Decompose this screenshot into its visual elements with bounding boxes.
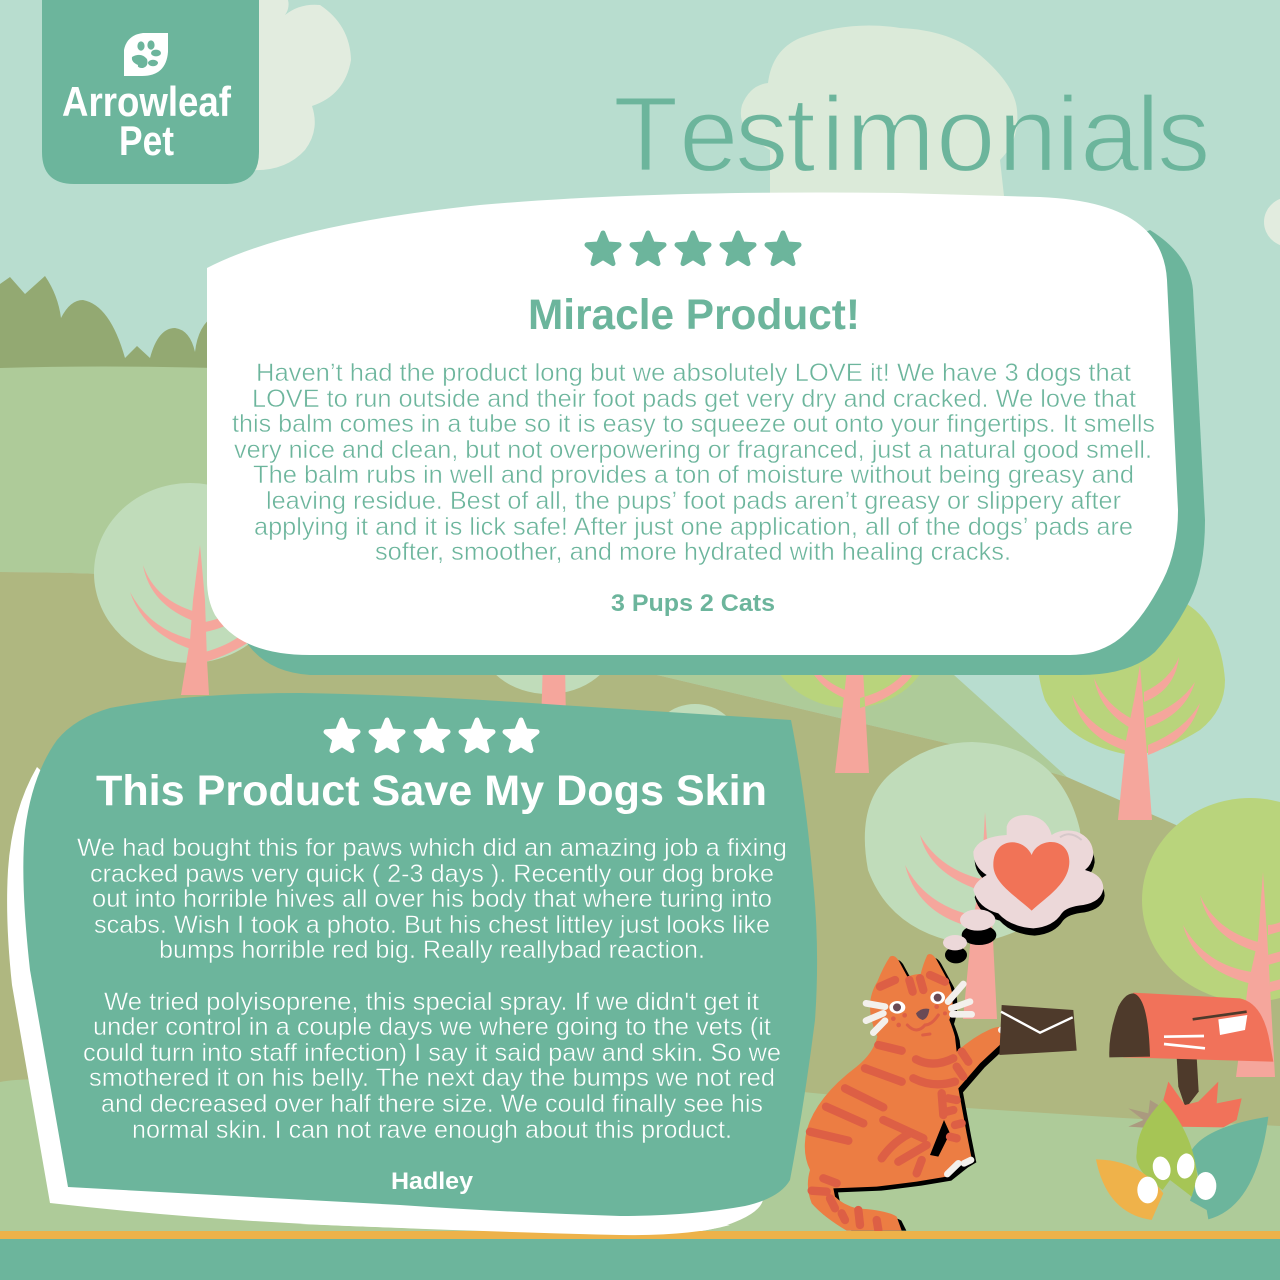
review text: very nice and clean, but not overpowering or fragranced, just a natural good smell. xyxy=(234,436,1152,464)
bottom stripe xyxy=(0,1231,1280,1280)
review text: and decreased over half there size. We could finally see his xyxy=(101,1090,763,1118)
panel: second review xyxy=(23,693,817,1216)
logo badge xyxy=(42,0,259,184)
mailbox xyxy=(1109,993,1273,1108)
panel: first review xyxy=(207,192,1178,655)
review text: Haven’t had the product long but we absolutely LOVE it! We have 3 dogs that xyxy=(256,359,1131,387)
icon: leaf with paw xyxy=(124,33,168,76)
review text: this balm comes in a tube so it is easy to squeeze out onto your fingertips. It smells xyxy=(232,410,1155,438)
review text: normal skin. I can not rave enough about this product. xyxy=(132,1116,732,1144)
thought bubble xyxy=(943,815,1105,963)
review text: We had bought this for paws which did an amazing job a fixing xyxy=(77,834,787,862)
foreground meadow xyxy=(0,1079,1280,1240)
icon: heart xyxy=(993,842,1069,911)
reviewer name: Hadley xyxy=(391,1168,474,1195)
heading: Miracle Product: Miracle Product! xyxy=(528,291,860,339)
tree: right edge xyxy=(1142,798,1280,1077)
tree: far right back xyxy=(1038,590,1225,820)
tree: centre back xyxy=(480,586,616,725)
title xyxy=(616,94,1206,171)
tree: small back xyxy=(653,704,737,776)
logo badge: Pet xyxy=(119,117,174,164)
review text: out into horrible hives all over his body that where turing into xyxy=(92,885,772,913)
review text xyxy=(232,359,1155,566)
tree: left xyxy=(94,483,286,695)
review text: smothered it on his belly. The next day the bumps we not red xyxy=(89,1064,775,1092)
tree: behind cat xyxy=(865,742,1080,1019)
heading: This Product Save My Dogs Skin: This Product Save My Dogs Skin xyxy=(96,767,767,815)
panel: second review shadow overlap on stripe xyxy=(300,1215,730,1235)
grass tuft xyxy=(1128,1082,1242,1128)
review text: under control in a couple days we where going to the vets (it xyxy=(93,1013,771,1041)
logo wordmark: Arrowleaf xyxy=(62,78,232,125)
review text: bumps horrible red big. Really reallybad reaction. xyxy=(159,936,705,964)
review text: leaving residue. Best of all, the pups’ foot pads aren’t greasy or slippery after xyxy=(266,487,1121,515)
review text: applying it and it is lick safe! After just one application, all of the dogs’ pads are xyxy=(254,513,1133,541)
panel: second review shadow xyxy=(7,767,763,1235)
review text xyxy=(77,834,787,1144)
review text: The balm rubs in well and provides a ton of moisture without being greasy and xyxy=(253,461,1134,489)
illustration: cat, thought bubble, mailbox, leaves xyxy=(805,815,1273,1231)
cloud: top left xyxy=(250,0,351,170)
green hill xyxy=(0,366,1067,777)
reviewer name: 3 Pups 2 Cats xyxy=(611,590,775,617)
review text: scabs. Wish I took a photo. But his chest littley just looks like xyxy=(94,911,770,939)
cloud: behind title xyxy=(741,26,1017,205)
envelope xyxy=(999,1005,1077,1055)
cloud: right edge xyxy=(1264,197,1280,247)
review text: LOVE to run outside and their foot pads get very dry and cracked. We love that xyxy=(252,385,1136,413)
leaves with paw prints xyxy=(1096,1100,1268,1220)
star rating xyxy=(587,233,799,264)
panel: first review shadow xyxy=(245,230,1205,675)
review text: We tried polyisoprene, this special spray. If we didn't get it xyxy=(104,988,759,1016)
review text: could turn into staff infection) I say it said paw and skin. So we xyxy=(83,1039,781,1067)
tree: centre right xyxy=(769,572,931,773)
review text: softer, smoother, and more hydrated with healing cracks. xyxy=(375,538,1011,566)
review text: cracked paws very quick ( 2-3 days ). Recently our dog broke xyxy=(90,860,774,888)
olive hill xyxy=(0,572,1280,1140)
far treeline xyxy=(0,276,215,372)
cat xyxy=(805,954,1012,1231)
star rating xyxy=(326,720,537,751)
